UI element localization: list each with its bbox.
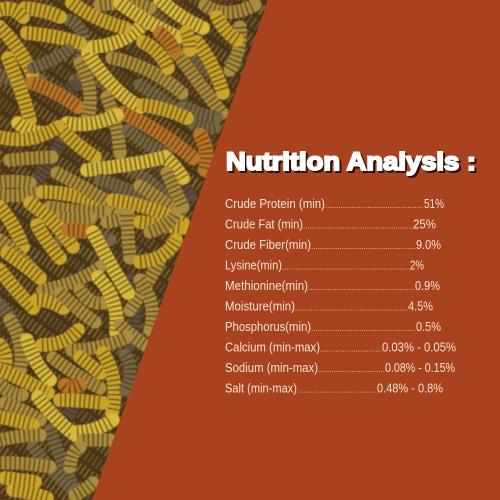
row: salt: Salt (min-max) — [225, 382, 297, 396]
row: salt: 0.48% - 0.8% — [377, 382, 443, 396]
row: calcium — [225, 340, 456, 354]
row: crude fiber — [225, 238, 441, 252]
row: crude protein — [225, 197, 444, 211]
row: crude fiber: ................................................ — [311, 242, 416, 251]
row: phosphorus — [225, 320, 441, 334]
row: crude fat: .................................................. — [303, 222, 413, 230]
row: crude protein: Crude Protein (min) — [225, 197, 325, 211]
row: calcium: ............................ — [320, 344, 382, 354]
row: lysine: Lysine(min) — [225, 258, 282, 272]
row: calcium: Calcium (min-max) — [225, 340, 320, 354]
row: methionine: 0.9% — [415, 279, 440, 293]
row: phosphorus: ................................................ — [311, 324, 416, 333]
row: moisture: Moisture(min) — [225, 300, 295, 314]
title: Nutrition Analysis : — [228, 150, 478, 178]
row: sodium: Sodium (min-max) — [225, 361, 318, 375]
title: Nutrition Analysis : — [226, 148, 476, 176]
row: crude protein: 51% — [424, 197, 444, 211]
row: crude protein: ............................................ — [325, 201, 423, 210]
row: moisture: ................................................... — [295, 304, 408, 312]
photo: pile of dried mealworm larvae — [0, 0, 290, 500]
row: crude fat — [225, 218, 436, 232]
row: moisture: 4.5% — [408, 300, 433, 314]
nutrition list — [225, 197, 456, 396]
row: sodium: 0.08% - 0.15% — [385, 361, 455, 375]
row: methionine: ................................................. — [308, 283, 415, 292]
row: sodium — [225, 361, 455, 375]
row: moisture — [225, 300, 433, 314]
row: phosphorus: Phosphorus(min) — [225, 320, 311, 334]
row: methionine: Methionine(min) — [225, 279, 308, 293]
row: lysine: .......................................................... — [282, 262, 410, 272]
row: crude fat: 25% — [413, 218, 436, 232]
row: sodium: .............................. — [318, 365, 385, 374]
row: crude fiber: Crude Fiber(min) — [225, 238, 311, 252]
row: salt: .................................... — [297, 386, 377, 394]
row: phosphorus: 0.5% — [416, 320, 441, 334]
row: lysine: 2% — [410, 258, 424, 272]
row: crude fat: Crude Fat (min) — [225, 218, 303, 232]
row: methionine — [225, 279, 440, 293]
row: lysine — [225, 258, 424, 272]
row: crude fiber: 9.0% — [416, 238, 441, 252]
row: calcium: 0.03% - 0.05% — [382, 340, 456, 354]
row: salt — [225, 382, 443, 396]
